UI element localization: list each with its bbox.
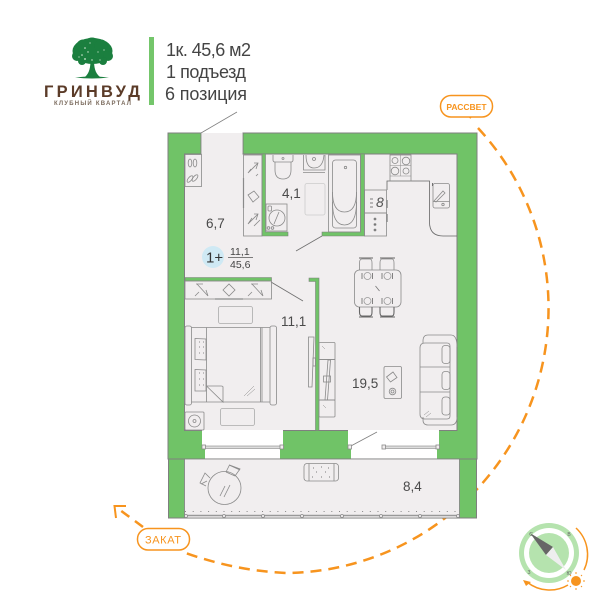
logo: Гринвуд [44, 38, 140, 107]
apartment floor [184, 154, 457, 430]
balcony pouf [304, 464, 338, 481]
room count badge [202, 246, 224, 268]
entrance [201, 112, 243, 155]
washing machine [266, 204, 287, 231]
logo subtitle: КЛУБНЫЙ КВАРТАЛ [54, 99, 131, 107]
bedside table [185, 412, 204, 430]
sun orbit arrow [527, 528, 588, 590]
bathtub [328, 155, 360, 232]
floor plan [168, 112, 477, 518]
sunset label: ЗАКАТ [145, 534, 181, 546]
area fraction: 45,6 [230, 259, 251, 271]
washbasin [303, 155, 325, 172]
door swings [271, 236, 322, 301]
hall wardrobe [244, 155, 262, 236]
dining table with chairs [354, 258, 401, 317]
compass letters: С [529, 532, 533, 538]
apartment info text: 1 подъезд [166, 62, 246, 82]
area fraction [228, 246, 253, 271]
area fraction: 11,1 [230, 246, 250, 258]
sunrise label: РАССВЕТ [446, 102, 487, 112]
bath mat [305, 184, 325, 215]
sun path arc [114, 113, 549, 573]
window: bedroom [202, 430, 284, 459]
logo name: ГРИНВУД [44, 83, 140, 101]
bathroom fixtures [266, 155, 360, 232]
interior walls [185, 154, 364, 430]
icon: sun [567, 572, 585, 590]
area labels: 19,5 [352, 376, 378, 391]
arrow: sunset [114, 506, 126, 518]
dishwasher [364, 200, 387, 236]
sunrise label [440, 96, 492, 117]
accent bar [149, 37, 154, 105]
balcony [168, 459, 476, 518]
hob [390, 155, 411, 181]
bedroom rug top [218, 306, 252, 324]
bedroom wardrobe [185, 281, 272, 299]
room count badge: 1+ [206, 250, 223, 266]
sofa [420, 335, 457, 425]
apartment info text: 6 позиция [165, 84, 247, 104]
compass needle [530, 533, 566, 570]
area labels: 6,7 [206, 216, 225, 231]
window and door: living room [348, 430, 440, 459]
outer walls [168, 133, 477, 459]
kitchen sink [432, 183, 450, 208]
area labels [206, 186, 422, 494]
icon: tree [72, 38, 113, 78]
compass letters: З [527, 570, 531, 576]
compass letters [527, 532, 572, 577]
sunset label [138, 528, 190, 550]
balcony table and chairs [200, 465, 241, 504]
coffee table [384, 366, 402, 398]
oven: 8 [376, 194, 384, 210]
compass [519, 523, 588, 590]
compass letters: В [567, 532, 571, 538]
compass letters: Ю [566, 571, 572, 577]
hall shoe rack [185, 154, 202, 186]
area labels: 8,4 [403, 479, 422, 494]
area labels: 11,1 [281, 314, 306, 329]
area labels: 4,1 [282, 186, 301, 201]
bedroom TV [308, 337, 316, 387]
apartment info text: 1к. 45,6 м2 [166, 40, 251, 60]
toilet [273, 155, 293, 179]
double bed [185, 326, 276, 405]
kitchen [364, 155, 457, 236]
living room TV unit [319, 342, 335, 417]
apartment info text [165, 40, 251, 104]
bedroom rug bottom [220, 408, 254, 426]
